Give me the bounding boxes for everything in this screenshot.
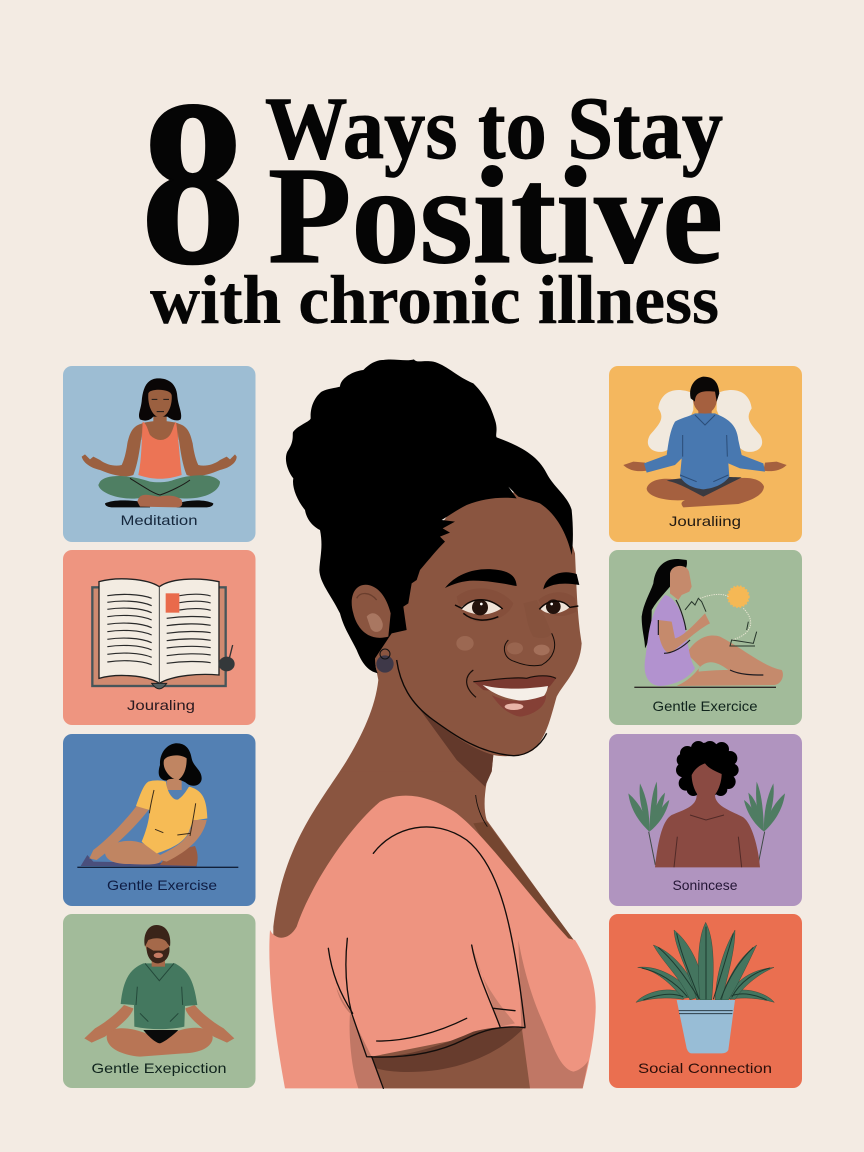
figure: bearded man meditating <box>84 925 234 1057</box>
panel: Jouraling book <box>63 550 256 725</box>
central portrait of smiling woman <box>269 359 596 1088</box>
figure: man meditating with cream wings <box>623 377 787 507</box>
plant left <box>628 782 669 832</box>
panel: Social Connection <box>609 914 802 1088</box>
panel: Gentle Exercice <box>609 550 802 725</box>
hair <box>286 359 573 673</box>
afro hair <box>676 741 739 796</box>
label: Gentle Exercice <box>652 698 758 714</box>
panel: Gentle Exepicction <box>63 914 256 1088</box>
label: Jouraling <box>127 697 195 713</box>
head, hair and face <box>286 359 582 827</box>
figure: woman sitting and stretching <box>77 743 238 867</box>
panel: Jouraliing <box>609 366 802 542</box>
panel: Meditation <box>63 366 256 542</box>
label: Jouraliing <box>669 513 741 529</box>
label: Gentle Exercise <box>107 877 217 893</box>
title line: Ways to Stay: Ways to Stay <box>265 80 723 178</box>
bookmark <box>166 593 179 613</box>
figure: person with afro between plants <box>628 741 785 867</box>
figure: woman meditating <box>82 378 237 507</box>
eyebrows <box>445 569 579 589</box>
panel: Sonincese <box>609 734 802 906</box>
title line: Positive: Positive <box>268 139 723 293</box>
icon: potted plant <box>636 922 774 1053</box>
pen tip <box>229 645 233 658</box>
eyes <box>460 600 571 614</box>
label: Social Connection <box>638 1060 772 1076</box>
sun <box>728 586 749 607</box>
figure: woman sitting with sun <box>634 559 783 687</box>
ear <box>352 585 391 638</box>
panel: Gentle Exercise <box>63 734 256 906</box>
title <box>141 53 723 338</box>
earring <box>376 655 394 673</box>
title numeral 8: 8 <box>141 53 245 314</box>
jaw line <box>397 660 547 756</box>
icon: open book <box>92 579 235 689</box>
shoulders and shirt <box>269 758 596 1088</box>
title line: with chronic illness: with chronic illness <box>150 262 719 338</box>
label: Meditation <box>120 512 198 528</box>
leaves <box>636 922 774 1002</box>
smile <box>473 676 556 692</box>
label: Gentle Exepicction <box>92 1060 226 1076</box>
label: Sonincese <box>672 877 738 893</box>
eye shading <box>457 588 577 622</box>
pot <box>677 1000 735 1053</box>
nose <box>534 645 550 655</box>
